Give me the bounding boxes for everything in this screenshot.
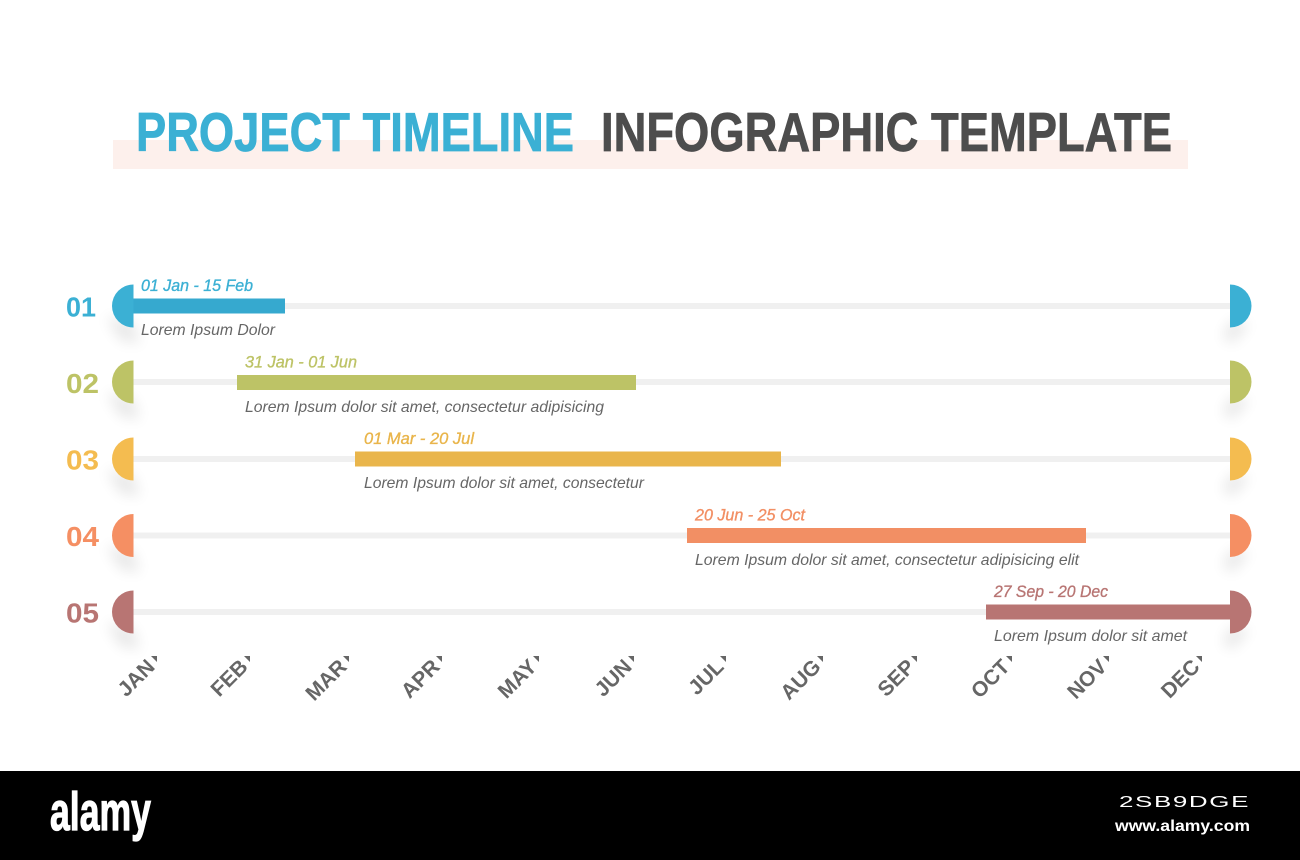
row 02 bbox=[66, 352, 1252, 420]
row 03: 03 bbox=[66, 444, 99, 476]
month axis labels: NOV bbox=[1063, 655, 1112, 704]
row 05: Lorem Ipsum dolor sit amet bbox=[994, 628, 1188, 645]
row 03: Lorem Ipsum dolor sit amet, consectetur bbox=[364, 475, 645, 492]
row 03 bbox=[66, 429, 1252, 497]
stock footer bar bbox=[0, 771, 1300, 860]
title bbox=[136, 101, 1172, 163]
row 03: 01 Mar - 20 Jul bbox=[364, 429, 475, 448]
month axis labels: AUG bbox=[776, 655, 826, 705]
title: INFOGRAPHIC TEMPLATE bbox=[601, 101, 1172, 163]
month axis labels bbox=[114, 655, 1205, 705]
row 02: 31 Jan - 01 Jun bbox=[245, 352, 357, 372]
row 05 bbox=[66, 582, 1252, 650]
footer image id: 2SB9DGE bbox=[1119, 794, 1250, 811]
month axis labels: APR bbox=[397, 655, 445, 703]
month axis labels: SEP bbox=[874, 655, 920, 701]
row 01: 01 Jan - 15 Feb bbox=[141, 276, 253, 295]
row 04: Lorem Ipsum dolor sit amet, consectetur adipisicing elit bbox=[695, 552, 1080, 569]
month axis labels: JUN bbox=[591, 655, 637, 701]
row 02: 02 bbox=[66, 368, 99, 399]
month axis labels: MAR bbox=[301, 655, 352, 705]
month axis labels: JUL bbox=[684, 655, 729, 700]
row 04: 20 Jun - 25 Oct bbox=[694, 506, 806, 524]
title band bbox=[113, 140, 1188, 169]
row 01: 01 bbox=[66, 292, 96, 322]
row 01 bbox=[66, 276, 1252, 344]
month axis labels: DEC bbox=[1157, 655, 1205, 703]
month axis labels: FEB bbox=[207, 655, 253, 701]
row 05: 05 bbox=[66, 598, 99, 628]
row 02: Lorem Ipsum dolor sit amet, consectetur adipisicing bbox=[245, 399, 604, 416]
row 04: 04 bbox=[66, 521, 99, 552]
row 01: Lorem Ipsum Dolor bbox=[141, 322, 276, 339]
title: PROJECT TIMELINE bbox=[136, 101, 574, 163]
row 04 bbox=[66, 506, 1252, 573]
month axis labels: JAN bbox=[114, 655, 160, 701]
month axis labels: OCT bbox=[967, 655, 1015, 703]
month axis labels: MAY bbox=[494, 655, 542, 703]
footer url: www.alamy.com bbox=[1114, 818, 1250, 835]
footer logo: alamy bbox=[50, 782, 151, 842]
row 05: 27 Sep - 20 Dec bbox=[993, 582, 1108, 601]
